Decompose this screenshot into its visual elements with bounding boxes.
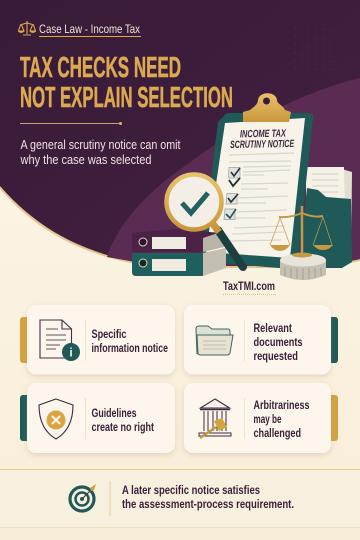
card: relevant documents requested: [184, 305, 338, 374]
clipboard heading: SCRUTINY NOTICE: [230, 138, 295, 151]
card: relevant documents requested: documents: [254, 335, 303, 349]
title: TAX CHECKS NEED: [20, 52, 181, 84]
illustration: balance scales on pedestal: [270, 206, 333, 280]
subtitle: [20, 137, 181, 167]
card text: Arbitrariness: [254, 398, 310, 412]
illustration: magnifying glass: [166, 174, 243, 267]
scales: [270, 206, 333, 258]
conclusion text: A later specific notice satisfies: [122, 483, 260, 497]
pedestal: [280, 255, 326, 280]
card: specific information notice: information notice: [92, 341, 168, 355]
icon: courthouse with gavel: [199, 399, 231, 438]
conclusion band: [0, 470, 360, 528]
subtitle: A general scrutiny notice can omit: [20, 137, 181, 152]
card: relevant documents requested: requested: [254, 349, 298, 363]
card: guidelines create no right: create no right: [92, 420, 154, 434]
title rule: [20, 122, 122, 125]
clipboard checkboxes: [224, 168, 240, 220]
teal binder: [132, 253, 203, 276]
icon: document with info badge: [40, 320, 80, 361]
clipboard heading: INCOME TAX: [240, 128, 287, 140]
clipboard heading: [230, 127, 295, 151]
decorative dot grid: [294, 28, 331, 70]
icon: document with info badge: i: [69, 346, 73, 360]
illustration: clipboard: [201, 93, 313, 269]
header text: Case Law - Income Tax: [39, 22, 140, 36]
background: purple header shape: [0, 0, 360, 268]
card: specific information notice: [20, 305, 175, 374]
card text: Guidelines: [92, 406, 137, 420]
card: guidelines create no right: [20, 383, 175, 453]
header label: [18, 21, 141, 37]
icon: folder: [196, 326, 233, 355]
subtitle: why the case was selected: [20, 152, 152, 167]
card: arbitrariness may be challenged: challenged: [254, 426, 301, 440]
card: arbitrariness may be challenged: may be: [254, 412, 282, 426]
icon: shield with x: [39, 399, 73, 439]
illustration: folder behind clipboard: [298, 167, 352, 268]
icon: scales of justice: [18, 21, 36, 35]
clipboard board: [201, 113, 313, 269]
title: [20, 52, 233, 114]
purple binder: [132, 229, 220, 252]
card: arbitrariness may be challenged: [184, 383, 338, 453]
card text: Specific: [92, 327, 127, 341]
clipboard lines: [229, 153, 294, 241]
card text: Relevant: [254, 321, 292, 335]
icon: target with arrow: [70, 484, 96, 511]
illustration: binders: [132, 229, 226, 276]
clipboard paper: [206, 118, 305, 258]
website label: TaxTMI.com: [223, 281, 275, 293]
clipboard gold clip: [243, 93, 291, 122]
conclusion band: the assessment-process requirement.: [122, 497, 294, 511]
